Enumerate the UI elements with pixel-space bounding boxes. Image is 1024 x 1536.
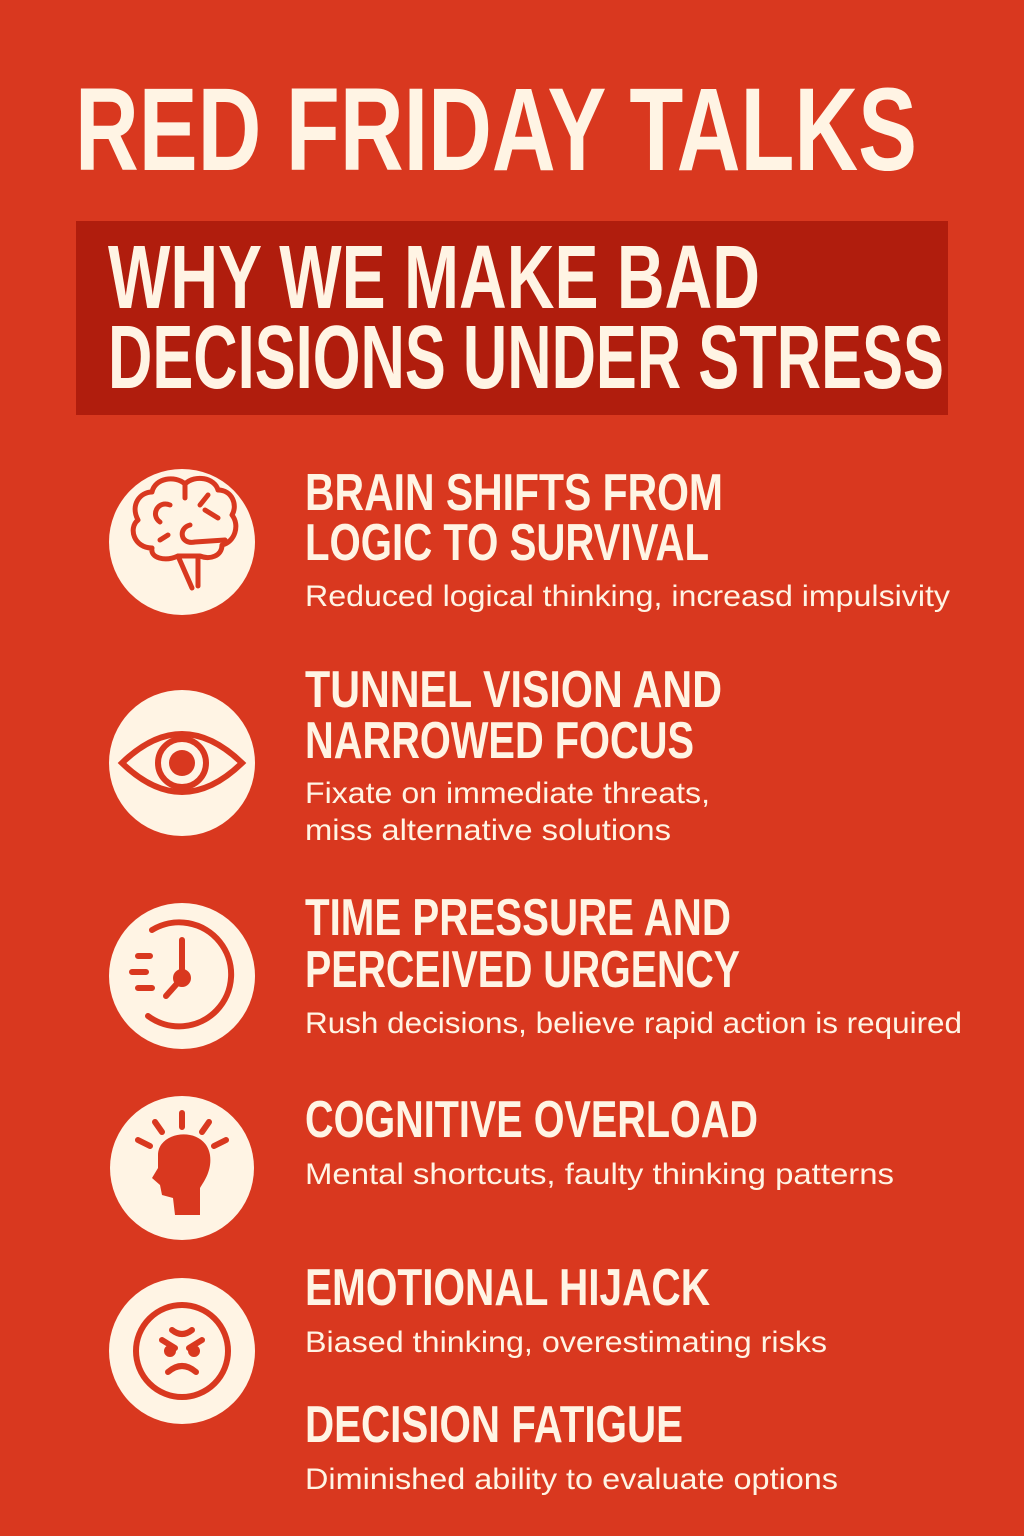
- icon: brain: [109, 469, 255, 615]
- item 6 text: [305, 1396, 838, 1496]
- item 3 text: [305, 889, 962, 1040]
- icon: clock: [109, 903, 255, 1049]
- banner: subtitle: [76, 221, 948, 415]
- item 1 text: BRAIN SHIFTS FROM: [305, 464, 723, 522]
- item 3 text: PERCEIVED URGENCY: [305, 941, 740, 999]
- icon: head with lightbulb rays: [110, 1096, 254, 1240]
- item 5 text: Biased thinking, overestimating risks: [305, 1326, 827, 1359]
- item 5 text: [305, 1259, 827, 1359]
- item 5 text: EMOTIONAL HIJACK: [305, 1259, 710, 1317]
- item 2 text: NARROWED FOCUS: [305, 712, 694, 770]
- banner: subtitle: WHY WE MAKE BAD: [108, 228, 760, 328]
- item 1 text: [305, 464, 950, 613]
- item 1 text: Reduced logical thinking, increasd impulsivity: [305, 580, 950, 613]
- item 1 text: LOGIC TO SURVIVAL: [305, 514, 709, 572]
- icon: eye: [109, 690, 255, 836]
- item 4 text: [305, 1091, 894, 1191]
- item 2 text: miss alternative solutions: [305, 814, 671, 847]
- item 4 text: Mental shortcuts, faulty thinking patterns: [305, 1158, 894, 1191]
- item 3 text: TIME PRESSURE AND: [305, 889, 731, 947]
- item 2 text: [305, 661, 722, 847]
- item 2 text: TUNNEL VISION AND: [305, 661, 722, 719]
- icon: angry face: [109, 1278, 255, 1424]
- item 3 text: Rush decisions, believe rapid action is required: [305, 1007, 962, 1040]
- item 6 text: DECISION FATIGUE: [305, 1396, 683, 1454]
- item 4 text: COGNITIVE OVERLOAD: [305, 1091, 758, 1149]
- item 2 text: Fixate on immediate threats,: [305, 777, 710, 810]
- item 6 text: Diminished ability to evaluate options: [305, 1463, 838, 1496]
